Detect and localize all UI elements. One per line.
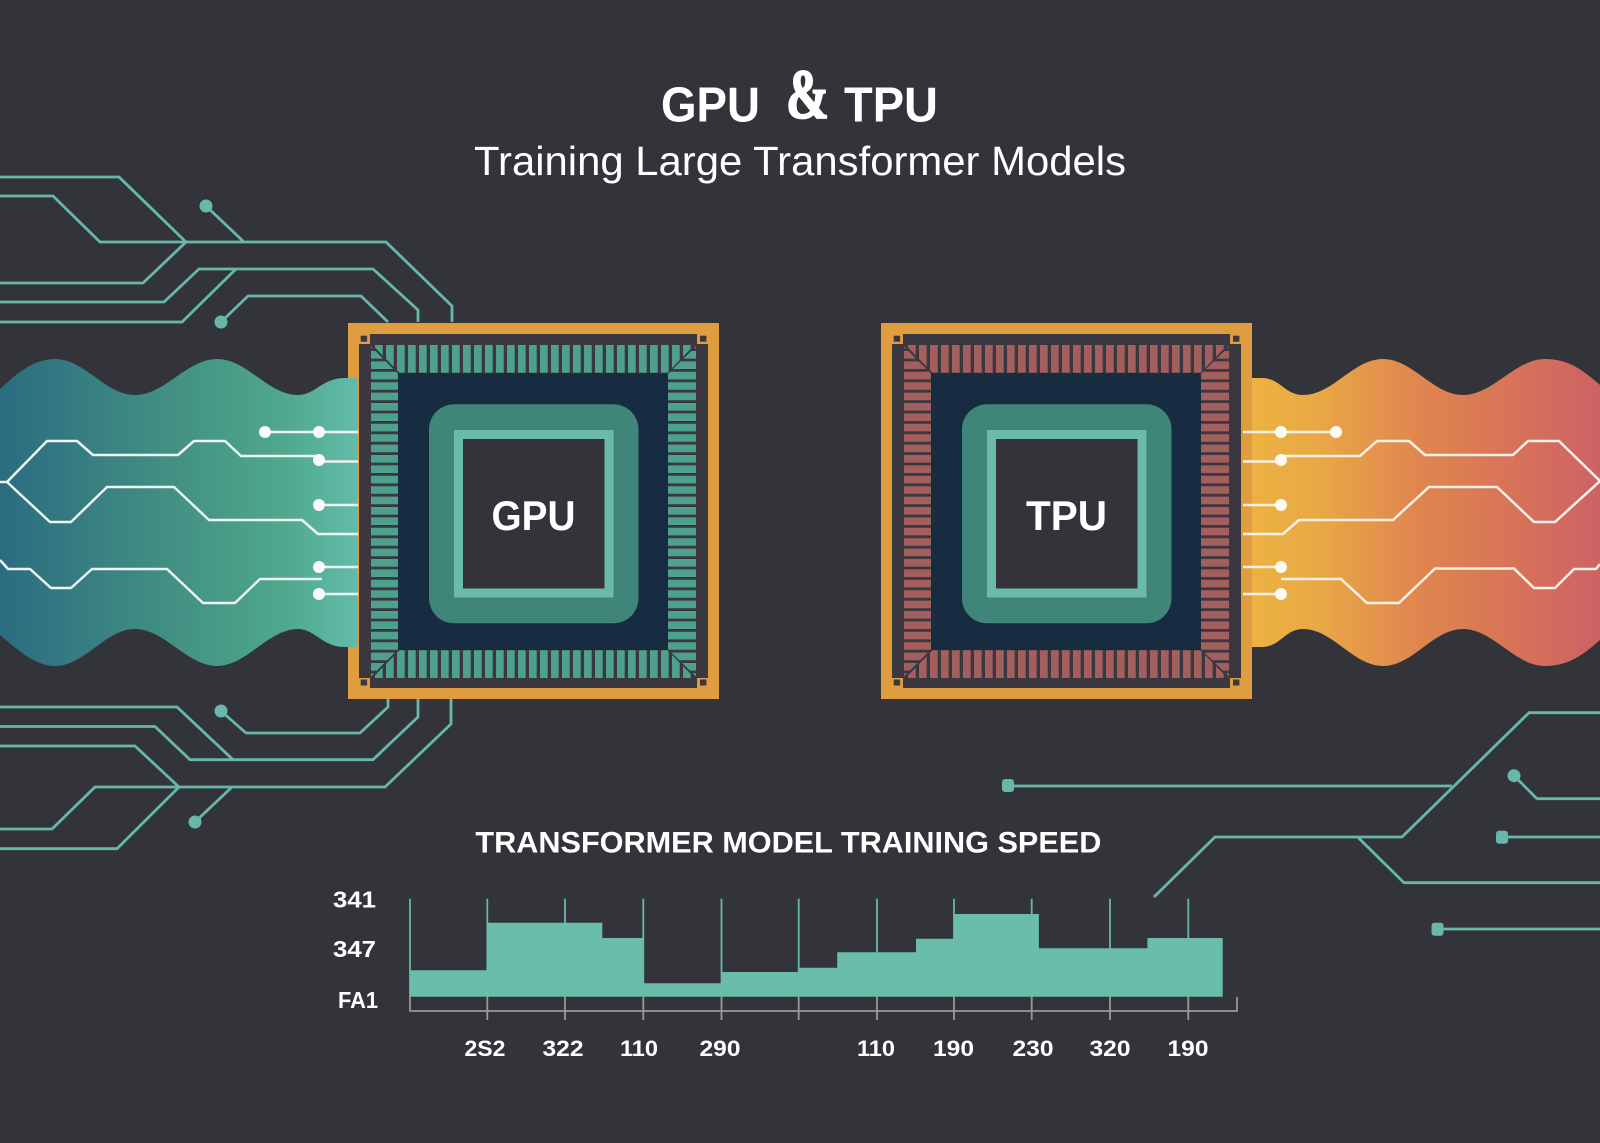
circuit traces: lower left: [0, 699, 451, 849]
y axis labels: 341: [333, 886, 376, 912]
chip frame: [348, 323, 719, 699]
x axis: [410, 997, 1237, 1020]
x axis labels: 190: [1168, 1036, 1208, 1061]
left data stream: [0, 359, 358, 666]
stepped area: [410, 914, 1223, 997]
title: GPU: [661, 78, 760, 132]
chart heading: TRANSFORMER MODEL TRAINING SPEED: [475, 826, 1101, 860]
subtitle: Training Large Transformer Models: [474, 138, 1126, 184]
x axis labels: [464, 1036, 1208, 1061]
pads: [908, 341, 1229, 680]
right data stream: [1252, 359, 1600, 666]
circuit traces: upper left: [0, 177, 452, 328]
core: [429, 404, 638, 623]
y axis labels: [333, 886, 378, 1013]
chip frame: [881, 323, 1252, 699]
x axis labels: 190: [933, 1036, 974, 1061]
GPU label: GPU: [492, 492, 576, 539]
circuit traces: lower right: [1002, 713, 1600, 936]
x axis labels: 2S2: [464, 1036, 506, 1061]
x axis labels: 110: [857, 1036, 895, 1061]
core: [962, 404, 1172, 623]
TPU label: TPU: [1026, 492, 1107, 539]
x axis labels: 110: [620, 1036, 658, 1061]
pads: [375, 341, 696, 680]
gridlines: [410, 899, 1188, 997]
x axis labels: 322: [542, 1036, 584, 1061]
right stream traces: [1243, 426, 1600, 603]
bar chart: [333, 886, 1237, 1061]
panel: GPU chip: [348, 323, 719, 699]
title: [661, 57, 938, 134]
title: TPU: [844, 78, 938, 132]
x axis labels: 290: [700, 1036, 740, 1061]
x axis labels: 320: [1090, 1036, 1130, 1061]
y axis labels: FA1: [338, 987, 378, 1013]
y axis labels: 347: [333, 936, 376, 962]
navy die: [398, 373, 668, 650]
navy die: [931, 373, 1201, 650]
left stream traces: [0, 426, 358, 603]
panel: TPU chip: [881, 323, 1252, 699]
title: &: [786, 57, 829, 134]
x axis labels: 230: [1012, 1036, 1054, 1061]
